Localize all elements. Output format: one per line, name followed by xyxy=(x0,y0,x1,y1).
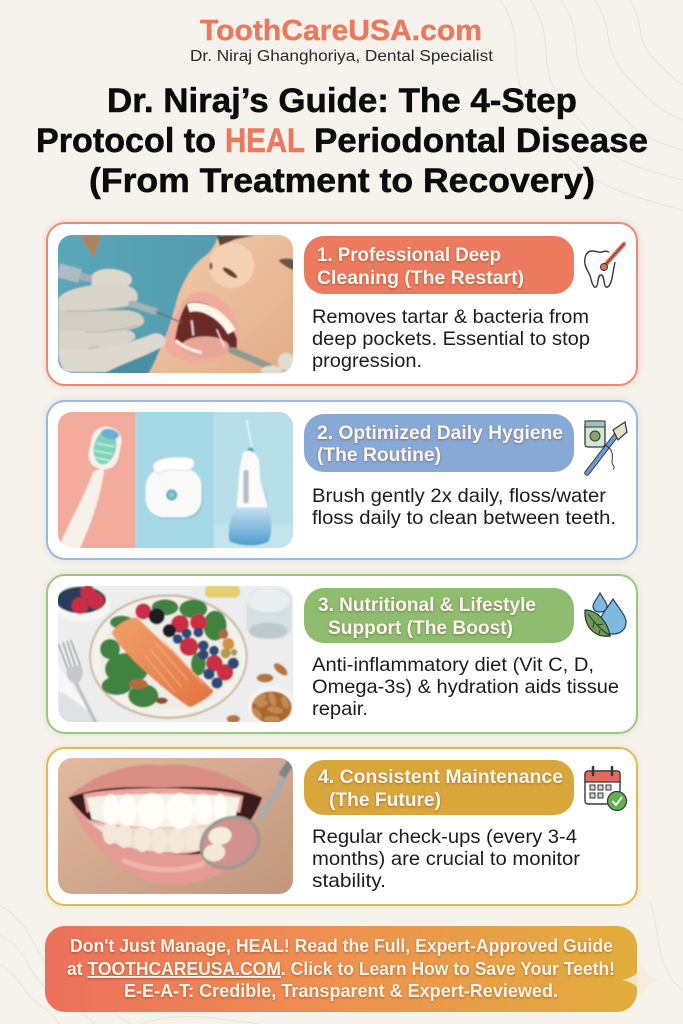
panel: step 2 daily hygiene xyxy=(47,401,637,559)
icon: water drops and leaf xyxy=(585,593,626,636)
panel: step 1 deep cleaning xyxy=(47,223,637,385)
icon: tooth and dental tool xyxy=(585,244,624,287)
panel: step 4 maintenance xyxy=(47,748,637,905)
step description xyxy=(312,654,619,720)
step heading pill: 4. Consistent Maintenance xyxy=(318,767,563,788)
step heading pill xyxy=(304,414,574,472)
panel: step 3 nutrition xyxy=(47,575,637,733)
icon: calendar with check xyxy=(585,767,626,810)
icon: sparkle xyxy=(622,958,660,1002)
photo: smile with dental mirror xyxy=(55,756,295,896)
step description: Regular check-ups (every 3-4 xyxy=(312,826,577,848)
step description: floss daily to clean between teeth. xyxy=(312,507,616,529)
title: HEAL xyxy=(225,122,305,160)
step heading pill: 3. Nutritional & Lifestyle xyxy=(318,595,536,616)
call to action banner xyxy=(45,926,660,1012)
author line: Dr. Niraj Ghanghoriya, Dental Specialist xyxy=(190,48,494,65)
step description: Brush gently 2x daily, floss/water xyxy=(312,485,607,507)
step heading pill: 2. Optimized Daily Hygiene xyxy=(317,423,563,444)
step description: Removes tartar & bacteria from xyxy=(312,306,589,328)
call to action banner: E-E-A-T: Credible, Transparent & Expert-Reviewed. xyxy=(124,980,558,1001)
call to action banner: at TOOTHCAREUSA.COM. Click to Learn How to Save Your Teeth! xyxy=(67,958,615,979)
call to action banner: Don't Just Manage, HEAL! Read the Full, Expert-Approved Guide xyxy=(70,935,613,956)
step heading pill: (The Future) xyxy=(329,790,441,811)
brand header xyxy=(190,15,494,65)
step description: Omega-3s) & hydration aids tissue xyxy=(312,676,619,698)
step description xyxy=(312,485,616,529)
step description: deep pockets. Essential to stop xyxy=(312,328,590,350)
title: Protocol to xyxy=(36,122,216,160)
step description: stability. xyxy=(312,870,386,892)
step heading pill xyxy=(304,236,574,294)
step description: Anti-inflammatory diet (Vit C, D, xyxy=(312,654,594,676)
step description xyxy=(312,306,590,372)
step heading pill: Support (The Boost) xyxy=(328,618,513,639)
icon: floss and toothbrush xyxy=(585,421,627,473)
step description: months) are crucial to monitor xyxy=(312,848,581,870)
step description: repair. xyxy=(312,698,368,720)
photo: toothbrush, floss and water flosser xyxy=(55,410,295,550)
title: Dr. Niraj’s Guide: The 4-Step xyxy=(107,82,577,120)
step heading pill xyxy=(304,760,574,815)
step description xyxy=(312,826,581,892)
title: Periodontal Disease xyxy=(314,122,648,160)
title: (From Treatment to Recovery) xyxy=(89,162,595,200)
step heading pill: Cleaning (The Restart) xyxy=(317,268,524,289)
step description: progression. xyxy=(312,350,422,372)
step heading pill: 1. Professional Deep xyxy=(317,245,501,266)
photo: salmon plate with berries xyxy=(53,584,296,726)
title xyxy=(36,82,648,200)
photo: dentist cleaning teeth xyxy=(55,232,295,376)
site name: ToothCareUSA.com xyxy=(200,15,482,47)
step heading pill xyxy=(304,588,574,643)
step heading pill: (The Routine) xyxy=(317,445,441,466)
